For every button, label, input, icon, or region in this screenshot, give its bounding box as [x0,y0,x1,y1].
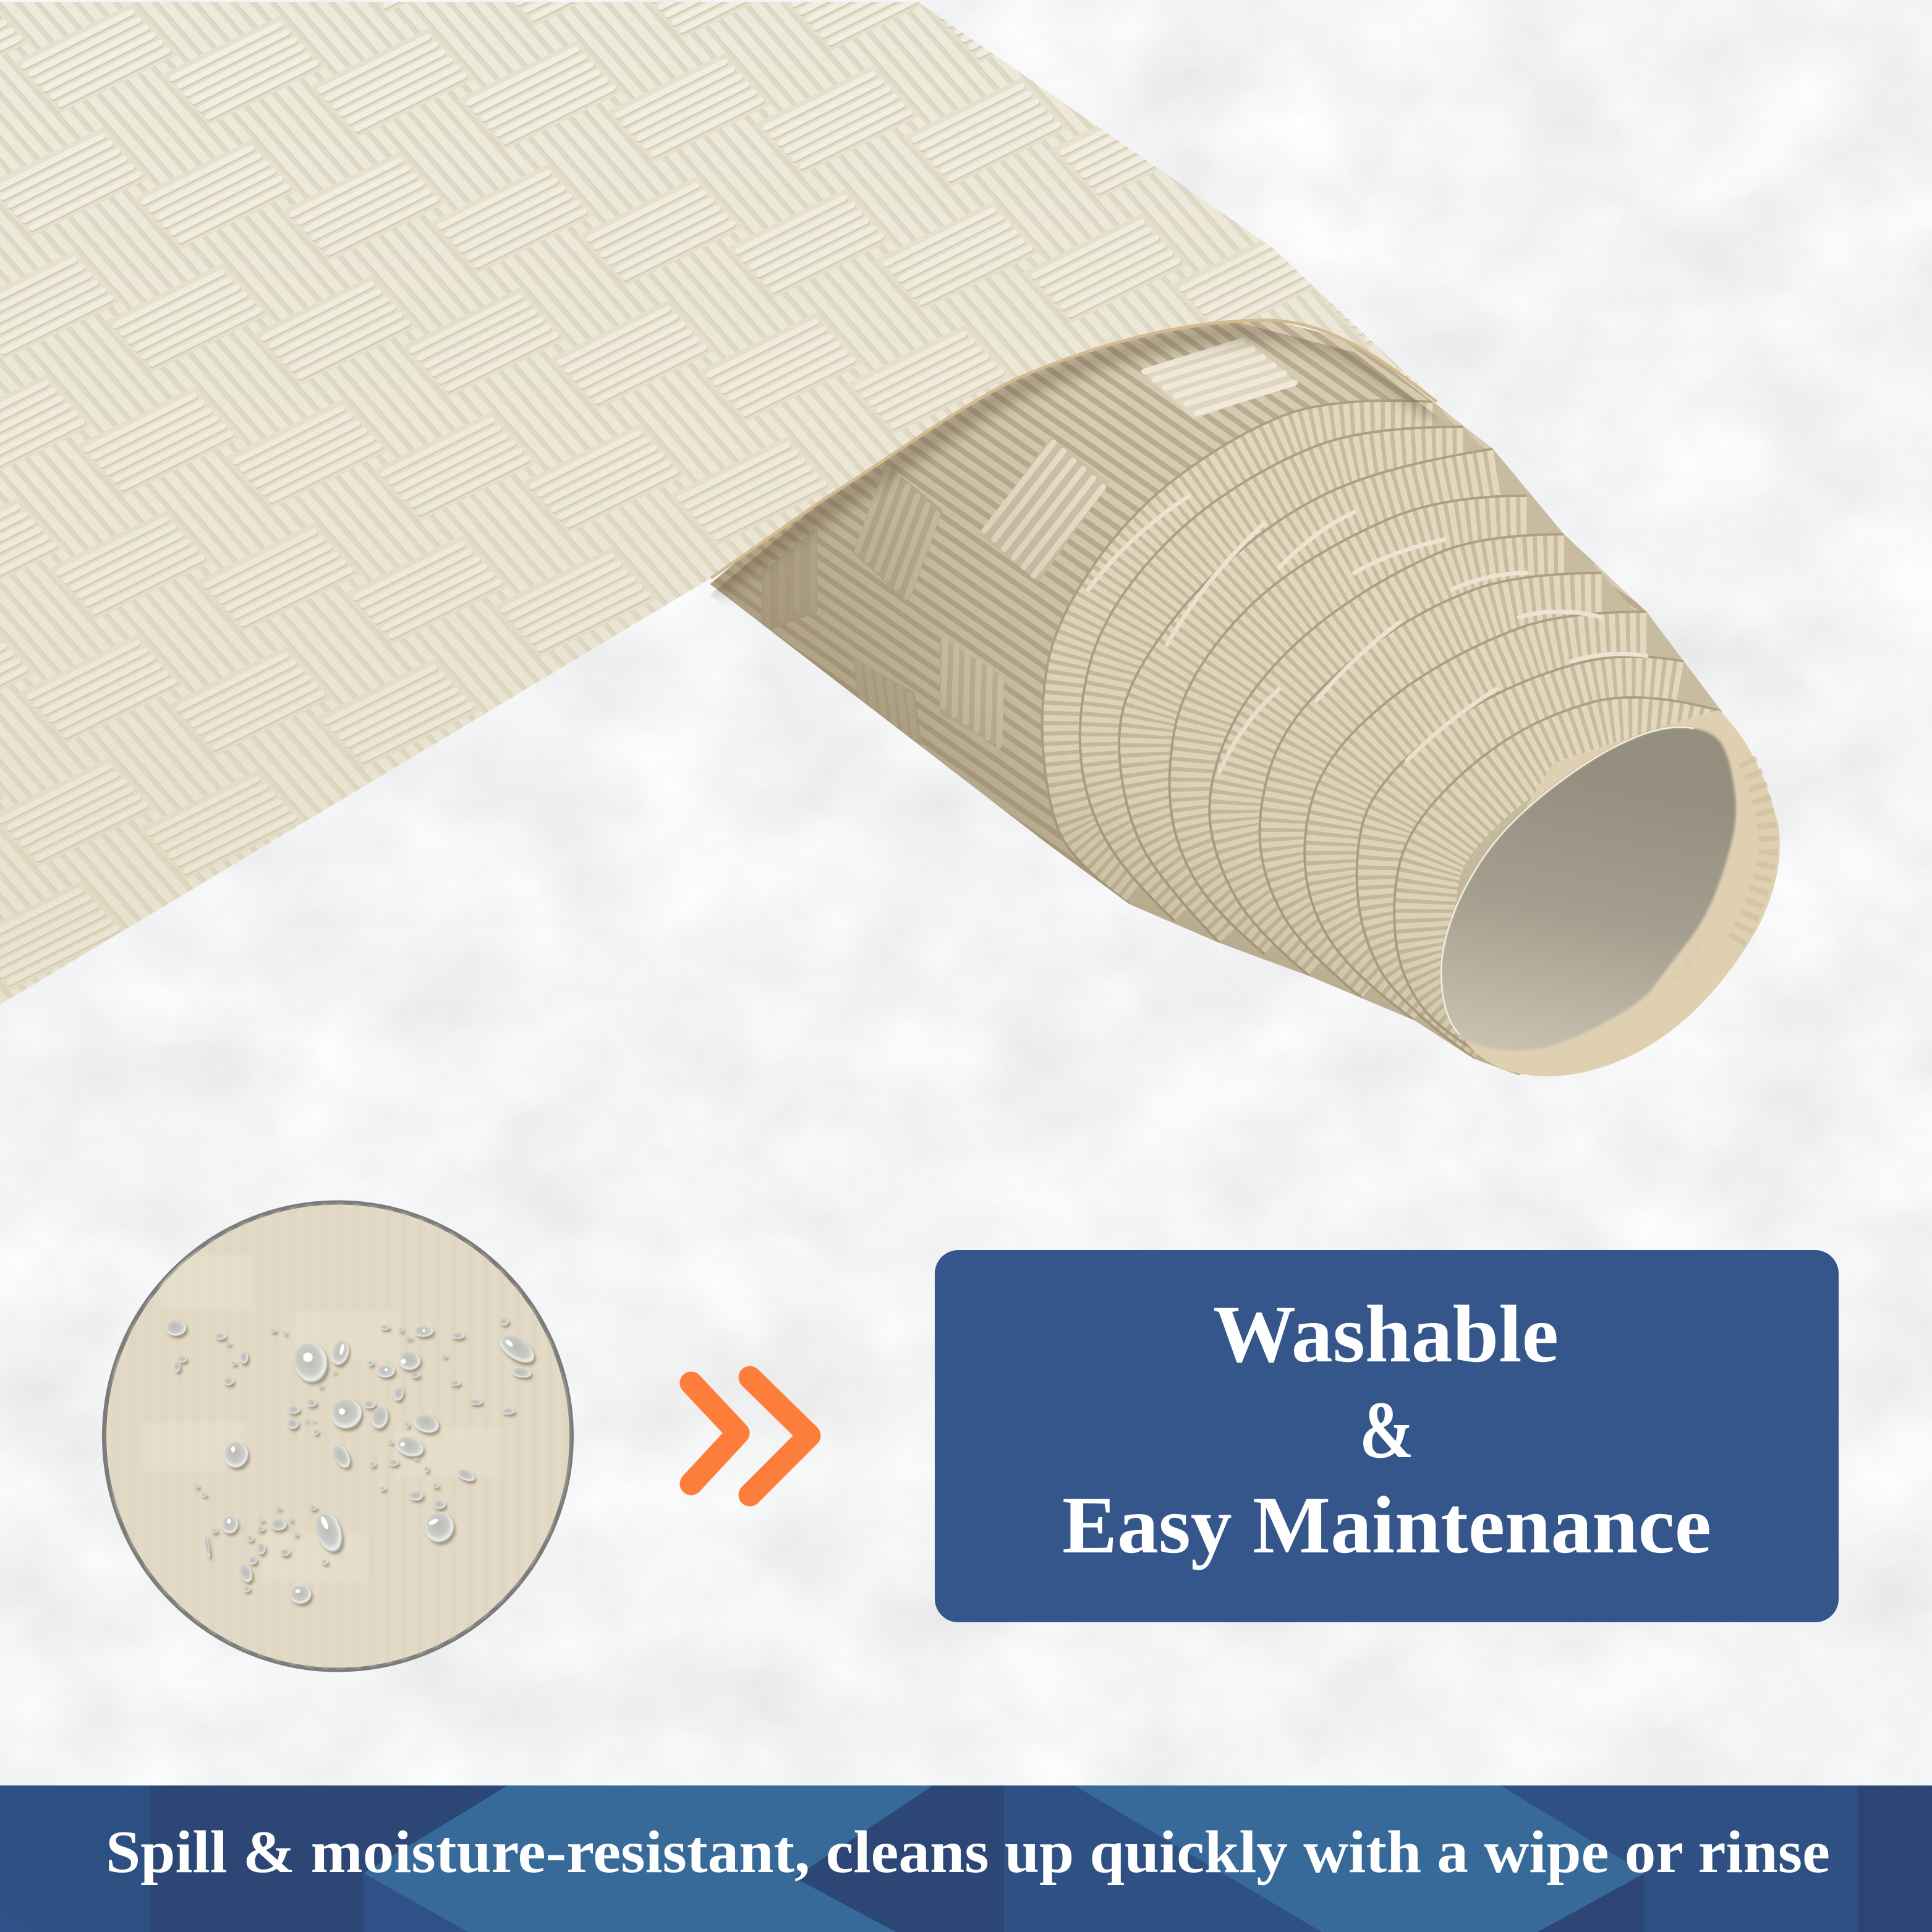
flat woven mat sheet [0,2,1437,1005]
roll opening with rim and inner surface [1441,710,1780,1076]
bottom banner [0,1785,1932,1932]
tan fold edge [711,320,1437,578]
shadow under the fold [711,331,1437,589]
arrow: double orange chevron [691,1377,809,1495]
heading line 1: Washable [1213,1288,1559,1379]
heading line 2: & [1360,1384,1414,1475]
warm tint over the sheet [0,2,1437,1005]
pale inner edge of the opening [1441,727,1694,1035]
second chevron [750,1377,809,1495]
inner surface of the tube [1441,727,1736,1050]
circle base [104,1202,571,1670]
shadow on the lower coils [831,671,1521,1075]
concentric coils of the roll [1042,401,1780,1075]
heading line 3: Easy Maintenance [1062,1479,1711,1570]
faint weave texture [102,1199,575,1672]
product: rolled placemat [0,2,1855,1113]
ribs seen through the tube [1653,931,1708,1003]
inner ribbed face of the roll [710,321,1722,1076]
droplet highlights [227,1329,514,1593]
banner geometric facets [0,1785,1932,1932]
ribs on the rim [1735,760,1769,942]
banner text: Spill & moisture-resistant, cleans up quickly with a wipe or rinse [106,1819,1830,1886]
panel background [935,1250,1839,1622]
rim [1443,710,1780,1076]
water droplets [166,1318,539,1604]
raised weave blocks on the roll face [762,337,1297,748]
first chevron [691,1383,738,1484]
banner base [0,1785,1932,1932]
callout: blue headline panel [935,1250,1839,1622]
shading across the roll face [710,433,1099,882]
rolled end of the mat [710,321,1780,1076]
detail circle: water droplets on mat [102,1199,575,1672]
